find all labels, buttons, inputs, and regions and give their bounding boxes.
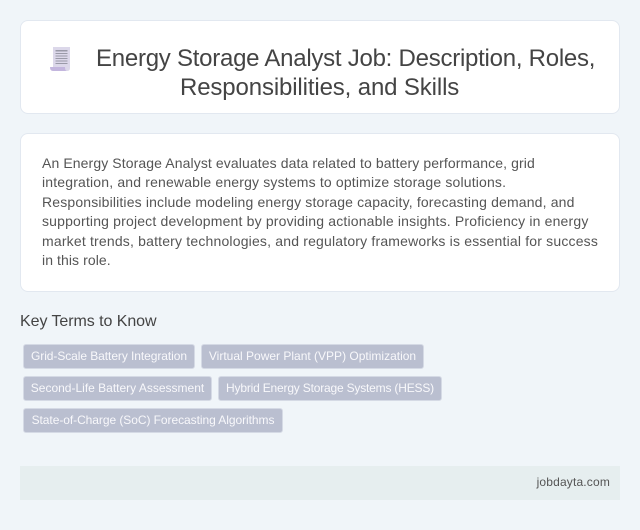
description text: Responsibilities include modeling energy storage capacity, forecasting demand, and	[42, 194, 575, 210]
tag: Hybrid Energy Storage Systems (HESS)	[226, 381, 434, 395]
description card	[20, 133, 620, 292]
icon: document scroll	[50, 47, 70, 71]
title: Responsibilities, and Skills	[180, 74, 459, 101]
tag	[23, 376, 212, 401]
heading: key terms: Key Terms to Know	[20, 313, 157, 330]
description text: market trends, battery technologies, and regulatory frameworks is essential for success	[42, 233, 598, 249]
footer source text: jobdayta.com	[537, 475, 610, 489]
footer	[20, 466, 620, 500]
tag: State-of-Charge (SoC) Forecasting Algorithms	[32, 413, 274, 427]
tag: Second-Life Battery Assessment	[31, 381, 204, 395]
description text: integration, and renewable energy systems to optimize storage solutions.	[42, 174, 506, 190]
description text: An Energy Storage Analyst evaluates data related to battery performance, grid	[42, 155, 535, 171]
description text: supporting project development by providing actionable insights. Proficiency in energy	[42, 213, 588, 229]
tag: Virtual Power Plant (VPP) Optimization	[209, 349, 416, 363]
tag: Grid-Scale Battery Integration	[31, 349, 187, 363]
title: Energy Storage Analyst Job: Description, Roles,	[96, 45, 595, 72]
title	[96, 45, 595, 101]
description text: in this role.	[42, 252, 111, 268]
header card	[20, 20, 620, 114]
tag	[23, 408, 283, 433]
tag	[201, 344, 424, 369]
tag	[218, 376, 442, 401]
tag	[23, 344, 195, 369]
description text	[42, 155, 598, 268]
tag list	[23, 344, 442, 433]
